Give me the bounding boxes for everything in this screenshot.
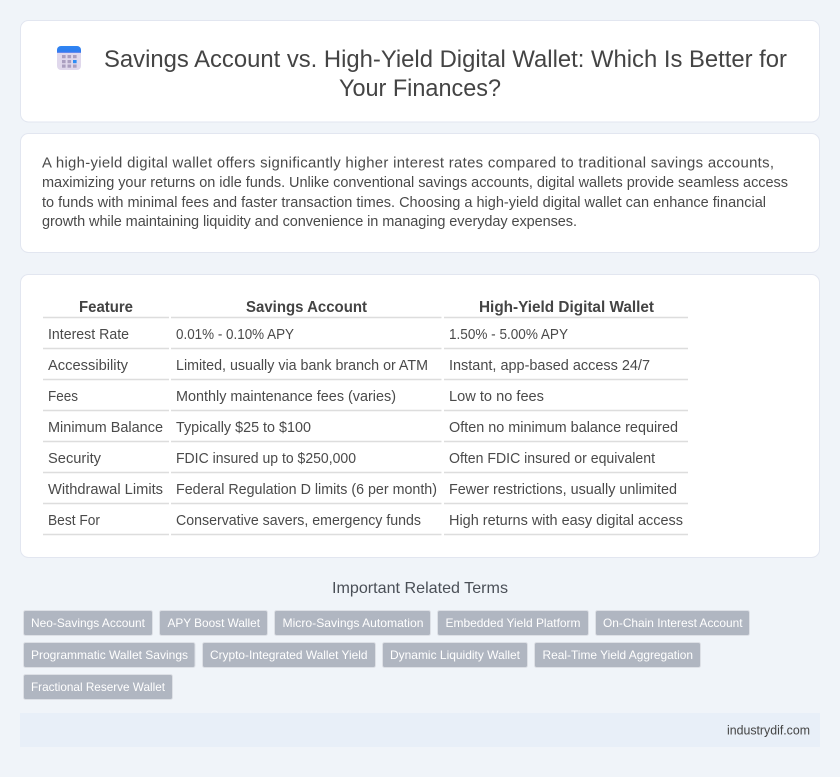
table header: High-Yield Digital Wallet bbox=[479, 299, 655, 316]
title bbox=[104, 46, 787, 102]
tag group: related terms: Micro-Savings Automation bbox=[282, 616, 424, 630]
row: fees: Fees bbox=[48, 389, 78, 405]
text block: intro: A high-yield digital wallet offers significantly higher interest rates compared to traditional savings accounts, bbox=[42, 156, 774, 172]
row: accessibility: Accessibility bbox=[48, 358, 129, 374]
row: security: Often FDIC insured or equivalent bbox=[449, 451, 655, 467]
row: interest rate bbox=[48, 327, 568, 343]
panel: comparison table bbox=[20, 274, 820, 558]
row: security: FDIC insured up to $250,000 bbox=[176, 451, 356, 467]
row: accessibility: Instant, app-based access 24/7 bbox=[449, 358, 650, 374]
table header bbox=[79, 299, 655, 316]
row: withdrawal limits: Withdrawal Limits bbox=[48, 482, 163, 498]
tag group: related terms: APY Boost Wallet bbox=[168, 616, 261, 630]
tag group: related terms: Crypto-Integrated Wallet Yield bbox=[210, 648, 368, 662]
tag group: related terms: Programmatic Wallet Savings bbox=[31, 648, 188, 662]
tag group: related terms: Real-Time Yield Aggregation bbox=[542, 648, 693, 662]
title: Savings Account vs. High-Yield Digital Wallet: Which Is Better for bbox=[104, 46, 787, 73]
row: security bbox=[48, 451, 655, 467]
tag group: related terms: Embedded Yield Platform bbox=[446, 616, 580, 630]
tag group: related terms: Dynamic Liquidity Wallet bbox=[390, 648, 521, 662]
table header: Feature bbox=[79, 299, 133, 316]
row: fees: Low to no fees bbox=[449, 389, 544, 405]
heading: related terms: Important Related Terms bbox=[332, 580, 508, 597]
row: accessibility bbox=[48, 358, 650, 374]
title: Your Finances? bbox=[339, 75, 501, 102]
text block: intro: maximizing your returns on idle funds. Unlike conventional savings accounts, digital wallets provide seamless access bbox=[42, 175, 788, 191]
panel: title card bbox=[20, 20, 820, 122]
row: minimum balance: Minimum Balance bbox=[48, 420, 163, 436]
row: best for: Conservative savers, emergency funds bbox=[176, 513, 421, 529]
footer bbox=[20, 713, 820, 747]
row: best for bbox=[48, 513, 683, 529]
row: withdrawal limits bbox=[48, 482, 677, 498]
row: interest rate: 1.50% - 5.00% APY bbox=[449, 327, 568, 343]
row: accessibility: Limited, usually via bank branch or ATM bbox=[176, 358, 428, 374]
row: minimum balance: Typically $25 to $100 bbox=[176, 420, 311, 436]
row: fees: Monthly maintenance fees (varies) bbox=[176, 389, 396, 405]
tag group: related terms: Neo-Savings Account bbox=[31, 616, 146, 630]
row: withdrawal limits: Federal Regulation D limits (6 per month) bbox=[176, 482, 437, 498]
row: fees bbox=[48, 389, 544, 405]
row: best for: High returns with easy digital access bbox=[449, 513, 683, 529]
text block: intro: growth while maintaining liquidity and convenience in managing everyday expenses. bbox=[42, 214, 577, 230]
row: minimum balance: Often no minimum balance required bbox=[449, 420, 678, 436]
row: best for: Best For bbox=[48, 513, 100, 529]
row: minimum balance bbox=[48, 420, 678, 436]
icon: calendar bbox=[57, 46, 81, 70]
row: withdrawal limits: Fewer restrictions, usually unlimited bbox=[449, 482, 677, 498]
panel: intro paragraph bbox=[20, 134, 820, 252]
row: interest rate: 0.01% - 0.10% APY bbox=[176, 327, 294, 343]
row: security: Security bbox=[48, 451, 102, 467]
tag group: related terms: On-Chain Interest Account bbox=[603, 616, 743, 630]
text block: intro bbox=[42, 156, 788, 230]
tag group: related terms: Fractional Reserve Wallet bbox=[31, 680, 166, 694]
footer: industrydif.com bbox=[727, 724, 810, 738]
tag group: related terms bbox=[24, 610, 750, 700]
text block: intro: to funds with minimal fees and faster transaction times. Choosing a high-yield digital wallet can enhance financial bbox=[42, 195, 766, 211]
row: interest rate: Interest Rate bbox=[48, 327, 129, 343]
table header: Savings Account bbox=[246, 299, 368, 316]
